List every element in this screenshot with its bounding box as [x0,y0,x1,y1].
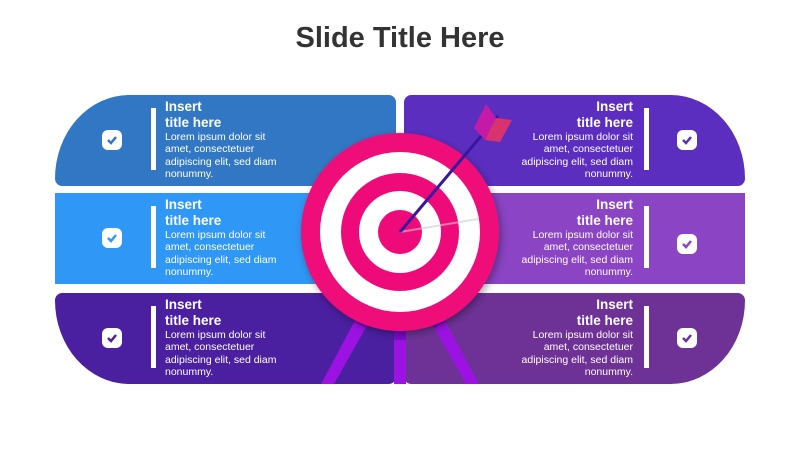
text block: amet, consectetuer [165,241,254,253]
text block: nonummy. [165,266,213,278]
text block: amet, consectetuer [544,341,633,353]
text block: Lorem ipsum dolor sit [533,329,633,341]
text block: Lorem ipsum dolor sit [533,229,633,241]
icon: check [677,328,697,348]
text block: amet, consectetuer [544,143,633,155]
icon: check [102,130,122,150]
text block: adipiscing elit, sed diam [522,354,633,366]
text block [165,297,276,378]
icon: check [102,228,122,248]
panel: right middle [404,193,745,284]
text block: Lorem ipsum dolor sit [533,131,633,143]
text block: title here [165,115,221,130]
text block: amet, consectetuer [165,341,254,353]
text block: adipiscing elit, sed diam [522,156,633,168]
text block: Lorem ipsum dolor sit [165,329,265,341]
text block: nonummy. [165,168,213,180]
text block: adipiscing elit, sed diam [165,156,276,168]
text block: title here [165,213,221,228]
panel: right bottom [404,293,745,384]
text block: Insert [165,197,202,212]
text block: title here [165,313,221,328]
stand legs [321,300,479,384]
text block [165,99,276,180]
text block: title here [577,115,633,130]
text block: Insert [596,197,633,212]
text block: title here [577,213,633,228]
panel: left top [55,95,396,186]
text block: nonummy. [165,366,213,378]
text block: title here [577,313,633,328]
text block: Insert [165,297,202,312]
text block: nonummy. [585,168,633,180]
text block: adipiscing elit, sed diam [165,354,276,366]
text block: Lorem ipsum dolor sit [165,131,265,143]
panel: right top [404,95,745,186]
text block: Insert [596,297,633,312]
text block: Lorem ipsum dolor sit [165,229,265,241]
target rings [301,133,499,331]
text block [522,99,633,180]
text block: amet, consectetuer [544,241,633,253]
title: Slide Title Here [296,22,504,54]
arrow [400,104,512,232]
text block [165,197,276,278]
panel: left bottom [55,293,396,384]
text block: adipiscing elit, sed diam [165,254,276,266]
icon: check [677,130,697,150]
icon: check [102,328,122,348]
text block: Insert [165,99,202,114]
text block [522,297,633,378]
text block: Insert [596,99,633,114]
text block: nonummy. [585,366,633,378]
panel: left middle [55,193,396,284]
text block: nonummy. [585,266,633,278]
text block: adipiscing elit, sed diam [522,254,633,266]
text block [522,197,633,278]
text block: amet, consectetuer [165,143,254,155]
icon: check [677,234,697,254]
